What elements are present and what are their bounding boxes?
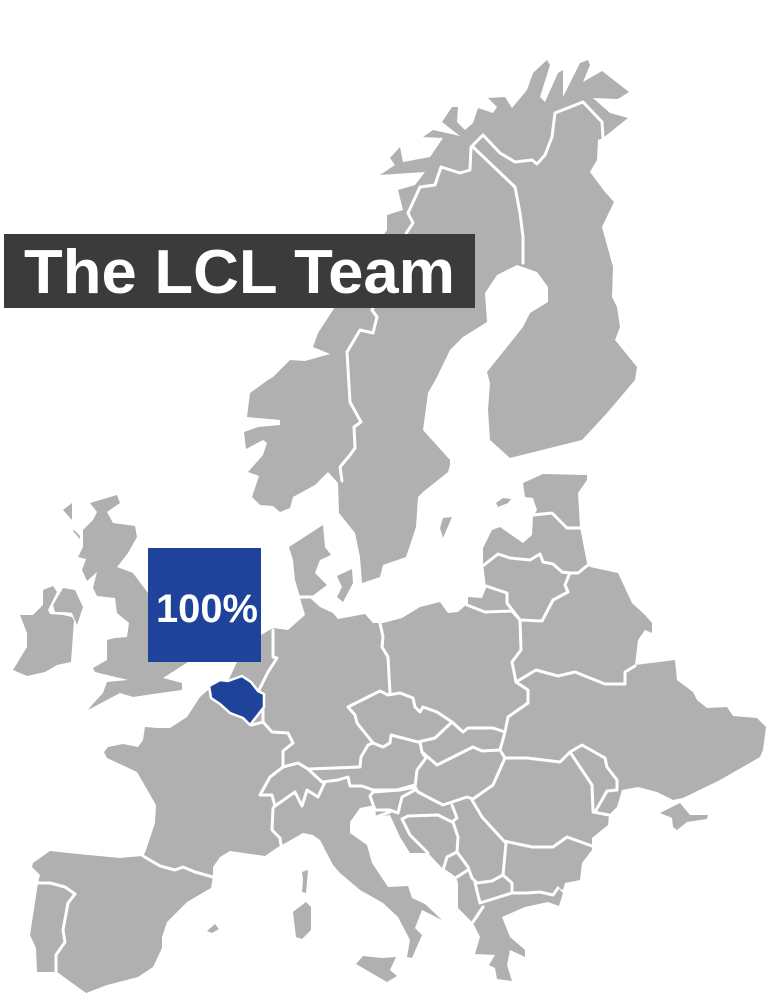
landmass: Skye sliver	[73, 530, 80, 539]
landmass: Denmark Jutland	[289, 525, 331, 597]
landmass: Great Britain	[78, 495, 188, 710]
landmass: Ireland	[13, 586, 74, 676]
landmass: Zealand	[337, 569, 353, 602]
islands: Gotland, Saaremaa, Corsica, Sardinia, Balearics, Sicily, Crimea	[207, 498, 708, 982]
national borders	[38, 102, 635, 972]
highlighted country: Belgium	[209, 676, 264, 725]
landmass: Northern Ireland	[53, 588, 83, 625]
callout: 100%	[148, 548, 261, 662]
landmass: continental Europe	[30, 474, 766, 993]
banner heading text: The LCL Team	[24, 238, 455, 307]
banner: The LCL Team	[4, 234, 475, 308]
landmass: Hebrides	[63, 503, 72, 520]
callout value text: 100%	[156, 587, 258, 631]
landmass: Scandinavia	[244, 60, 637, 583]
